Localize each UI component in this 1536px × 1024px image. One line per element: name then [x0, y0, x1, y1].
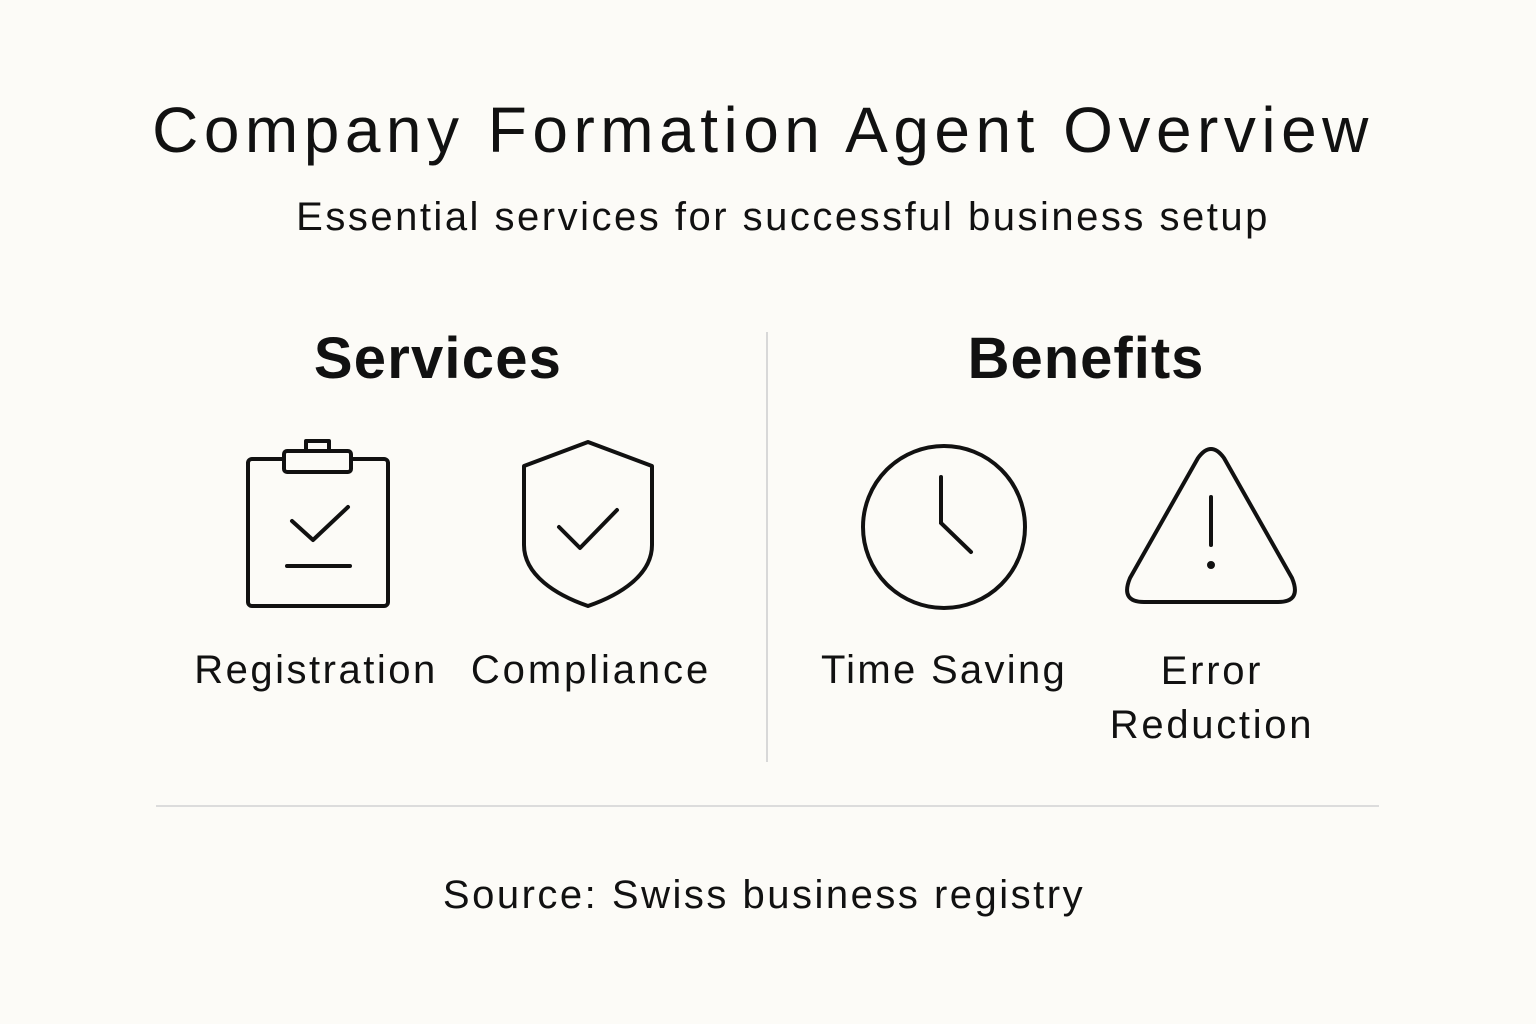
subtitle: Essential services for successful business setup [296, 195, 1270, 239]
icon: clipboard [246, 439, 390, 608]
label: compliance: Compliance [471, 648, 711, 692]
label: time saving: Time Saving [821, 648, 1067, 692]
source note: Source: Swiss business registry [443, 873, 1085, 917]
icon: shield [522, 440, 654, 608]
heading: services: Services [314, 326, 562, 391]
label: registration: Registration [194, 648, 438, 692]
icon: clock [861, 444, 1027, 610]
label: error reduction: Error [1161, 649, 1263, 693]
heading: benefits: Benefits [968, 326, 1204, 391]
title: Company Formation Agent Overview [152, 94, 1374, 166]
horizontal divider [156, 805, 1379, 807]
label: error reduction: Reduction [1110, 703, 1314, 747]
icon: warning triangle [1125, 447, 1297, 604]
vertical divider [766, 332, 768, 762]
label: error reduction [1110, 649, 1314, 747]
